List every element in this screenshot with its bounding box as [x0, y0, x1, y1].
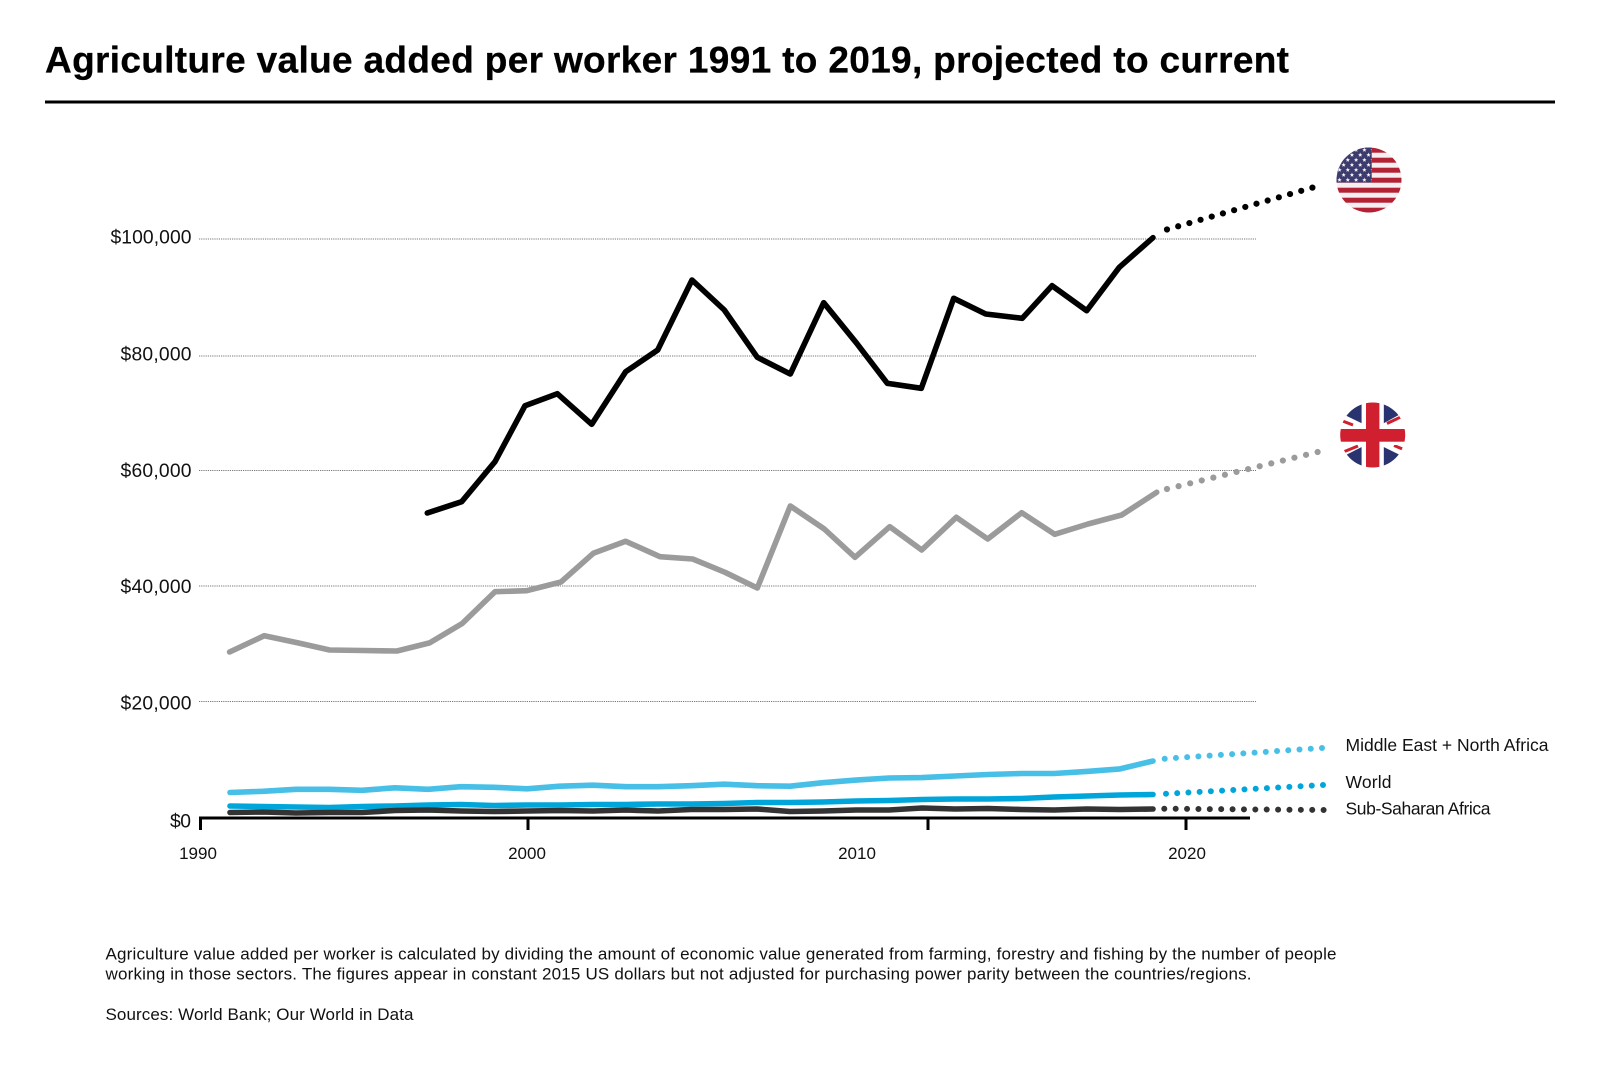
y axis labels: $0 [170, 812, 191, 833]
footnote: Sources: World Bank; Our World in Data [106, 1005, 414, 1024]
series labels: Middle East + North Africa [1346, 735, 1549, 755]
title rule [45, 100, 1555, 104]
footnote: Agriculture value added per worker is calculated by dividing the amount of economic value generated from farming, forestry and fishing by the number of people [106, 944, 1336, 963]
y axis labels: $40,000 [120, 577, 192, 598]
icon: US flag [1336, 147, 1402, 213]
line: Middle East + North Africa [230, 761, 1153, 792]
y axis labels [110, 227, 192, 833]
projection: Middle East + North Africa [1165, 748, 1322, 759]
line: United Kingdom [230, 492, 1157, 652]
line: Sub-Saharan Africa [230, 808, 1153, 813]
x axis labels: 2010 [838, 844, 876, 863]
projection: United Kingdom [1167, 452, 1318, 489]
x axis [200, 818, 1250, 830]
projection: United States [1167, 188, 1312, 230]
x axis labels: 2020 [1168, 844, 1206, 863]
line: United States [427, 238, 1153, 513]
projection: World [1166, 785, 1323, 794]
x axis labels: 2000 [508, 844, 546, 863]
footnote: working in those sectors. The figures appear in constant 2015 US dollars but not adjusted for purchasing power parity between the countries/regions. [104, 964, 1252, 983]
y axis gridlines [199, 239, 1256, 702]
series labels [1346, 735, 1549, 818]
series labels: Sub-Saharan Africa [1346, 798, 1491, 818]
y axis labels: $60,000 [120, 461, 192, 482]
title: Agriculture value added per worker 1991 to 2019, projected to current [45, 39, 1289, 80]
line: World [230, 794, 1153, 808]
chart: value added per worker [110, 147, 1549, 863]
series labels: World [1346, 772, 1392, 792]
projection: Sub-Saharan Africa [1164, 809, 1324, 810]
x axis labels [179, 844, 1206, 863]
x axis labels: 1990 [179, 844, 217, 863]
y axis labels: $80,000 [120, 345, 192, 366]
icon: UK flag [1340, 402, 1406, 468]
footnote [104, 944, 1336, 1024]
y axis labels: $20,000 [120, 694, 192, 714]
y axis labels: $100,000 [110, 227, 192, 248]
